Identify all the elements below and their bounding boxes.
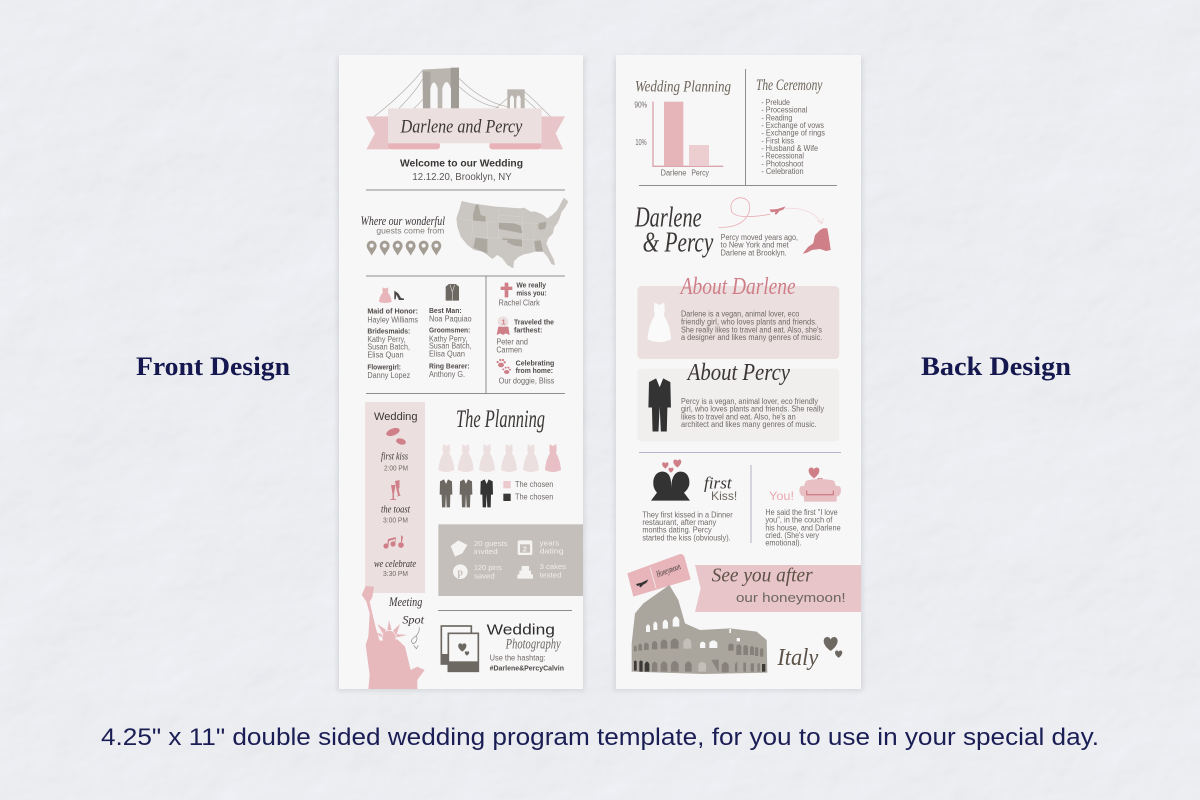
special mentions column: Our doggie, Bliss (499, 377, 554, 386)
bar chart: wedding planning: Percy (691, 168, 709, 177)
wedding party: middle column (429, 284, 472, 379)
panel: stats: saved (474, 571, 495, 580)
wedding party: left column: Susan Batch, (367, 343, 410, 352)
bar: Darlene (664, 102, 683, 166)
meeting spot note: Meeting (388, 595, 422, 609)
ribbon: see you after: our honeymoon! (736, 591, 846, 605)
first kiss story: months dating. Percy (642, 526, 712, 535)
we celebrate time (374, 559, 416, 578)
special mentions column: Carmen (496, 345, 522, 354)
panel: stats: 20 guests (474, 539, 508, 548)
wedding party: middle column: Susan Batch, (429, 342, 472, 351)
ribbon: see you after: See you after (712, 565, 813, 587)
ceremony list: - Reading (761, 113, 792, 122)
icon row: groomsmen suits (440, 479, 493, 507)
move story text: to New York and met (721, 241, 789, 250)
panel: About Darlene (637, 274, 839, 359)
label: Back Design: Back Design (921, 352, 1072, 381)
welcome heading: Welcome to our Wedding (400, 159, 523, 170)
special mentions column: miss you: (516, 288, 547, 297)
panel: About Percy: likes to travel and eat. Also, he's an (681, 412, 796, 421)
love story text: emotional). (765, 539, 802, 548)
panel: front design card (337, 55, 585, 691)
ceremony list: - Recessional (761, 152, 804, 161)
bar: Percy (689, 145, 709, 166)
icon: heel (394, 291, 404, 300)
ceremony list: - Exchange of vows (761, 121, 824, 130)
move story text (721, 233, 798, 257)
panel: About Percy (637, 360, 839, 441)
icon: kissing couple with hearts (651, 460, 690, 501)
legend (503, 480, 553, 502)
bar chart: wedding planning: 10% (635, 138, 647, 147)
panel: About Darlene: a designer and likes many genres of music. (681, 333, 822, 342)
panel: stats: 120 pins (474, 563, 502, 572)
first kiss story: restaurant, after many (642, 518, 716, 527)
icon row: location pins (367, 241, 441, 256)
move story text: Darlene at Brooklyn. (721, 248, 787, 257)
ceremony list: - Processional (761, 106, 808, 115)
schedule heading: Wedding (374, 411, 418, 423)
special mentions column: Peter and (496, 338, 528, 347)
icon: tuxedo (648, 378, 671, 432)
icon: champagne glasses (390, 480, 401, 500)
love story text: cried. (She's very (765, 531, 819, 540)
move story text: Percy moved years ago, (721, 233, 798, 242)
label: Front Design: Front Design (136, 352, 291, 381)
icon: bridesmaid dress (379, 287, 392, 303)
meeting spot note (388, 595, 425, 649)
welcome heading (400, 159, 523, 183)
panel: About Darlene: Darlene is a vegan, animal lover, eco (681, 310, 800, 319)
caption: 4.25" x 11" double sided wedding program template, for you to use in your special day. (101, 724, 1099, 751)
wedding party: left column: Bridesmaids: (367, 326, 410, 335)
love story text (765, 508, 841, 548)
legend: The chosen (515, 480, 553, 489)
illustration: Brooklyn bridge (374, 68, 551, 117)
icon: pinterest (453, 564, 468, 579)
we celebrate time: 3:30 PM (383, 571, 408, 578)
bar chart: wedding planning (634, 79, 731, 177)
wedding party: middle column: Groomsmen: (429, 326, 470, 335)
icon: medal: 1 (501, 317, 506, 326)
wedding party: left column: Maid of Honor: (367, 307, 418, 316)
welcome heading: 12.12.20, Brooklyn, NY (412, 172, 512, 183)
special mentions column: Celebrating (516, 358, 555, 367)
special mentions column: We really (516, 281, 547, 290)
wedding party: left column: Danny Lopez (367, 371, 410, 380)
icon: cake (517, 566, 533, 579)
you heading: You! (769, 489, 794, 503)
we celebrate time: we celebrate (374, 559, 416, 570)
special mentions column: from home: (516, 366, 553, 375)
special mentions column: Rachel Clark (499, 299, 540, 308)
icon: paw prints (496, 359, 511, 374)
panel: stats: invited (474, 547, 498, 556)
icon row: bridesmaid dresses (438, 444, 561, 472)
icon: calendar (518, 540, 532, 555)
wedding photography text (487, 622, 564, 672)
icon: envelope (451, 540, 467, 557)
guests origin heading: Where our wonderful (361, 214, 445, 228)
first kiss heading: first (704, 473, 733, 492)
illustration: Statue of Liberty (362, 586, 425, 689)
first kiss time: 2:00 PM (384, 466, 408, 472)
guests origin heading: guests come from (376, 226, 445, 235)
heading: The Planning: The Planning (456, 406, 545, 433)
illustration: Colosseum (632, 585, 767, 674)
heading: Wedding Planning (635, 79, 731, 96)
wedding party: left column (367, 287, 418, 380)
banner with names (366, 108, 565, 149)
the toast time (381, 504, 411, 524)
love story text: you", in the couch of (765, 516, 833, 525)
first kiss time (381, 450, 408, 472)
wedding photography text: Wedding (487, 622, 555, 638)
ceremony list: - Photoshoot (761, 159, 804, 168)
guests origin heading (361, 214, 445, 235)
panel: stats (438, 524, 583, 596)
panel: stats: dating (540, 546, 564, 555)
ceremony list: - Husband & Wife (761, 144, 818, 153)
special mentions column: Traveled the (514, 318, 554, 327)
ceremony list: - Exchange of rings (761, 129, 825, 138)
wedding photography text: #Darlene&PercyCalvin (490, 663, 564, 672)
icon: sofa with hearts (799, 468, 841, 502)
icon: wedding dress (647, 302, 671, 342)
wedding photography text: Photography (505, 636, 561, 652)
Italy label with hearts: Italy (776, 645, 819, 671)
Italy label with hearts (776, 637, 842, 671)
panel: stats: 3 cakes (540, 562, 566, 571)
the toast time: 3:00 PM (383, 518, 408, 524)
panel: stats: tested (540, 570, 562, 579)
first kiss story (642, 510, 733, 542)
panel: wedding schedule (365, 402, 425, 593)
icon: lips (385, 426, 407, 446)
wedding party: middle column: Anthony G. (429, 370, 465, 379)
panel: back design card (614, 55, 863, 691)
icon: honeymoon ticket (627, 554, 691, 597)
icon: plane (769, 206, 786, 214)
panel: About Percy: architect and likes many genres of music. (681, 420, 817, 429)
first kiss heading (704, 473, 737, 503)
icon: music notes (383, 535, 404, 549)
wedding party: left column: Hayley Williams (367, 315, 418, 324)
icon: New York state (803, 228, 831, 254)
first kiss story: They first kissed in a Dinner (642, 510, 733, 519)
panel: About Percy: girl, who loves plants and friends. She really (681, 405, 824, 414)
wedding party: left column: Kathy Perry, (367, 335, 406, 344)
bar chart: wedding planning: Darlene (661, 168, 687, 177)
flight path arrow (719, 198, 823, 227)
wedding photography text: Use the hashtag: (490, 654, 546, 663)
meeting spot note: Spot (402, 612, 425, 626)
icon: best man suit (446, 284, 459, 301)
panel: stats: years (540, 538, 559, 547)
wedding party: middle column: Ring Bearer: (429, 361, 470, 370)
icon: honeymoon ticket: Honeymoon (655, 562, 682, 580)
panel: About Percy: Percy is a vegan, animal lover, eco friendly (681, 397, 818, 406)
wedding party: middle column: Best Man: (429, 306, 462, 315)
special mentions column: farthest: (514, 325, 542, 334)
wedding party: middle column: Elisa Quan (429, 350, 465, 359)
wedding party: left column: Flowergirl: (367, 362, 401, 371)
first kiss time: first kiss (381, 450, 408, 462)
panel: About Darlene: She really likes to travel and eat. Also, she's (681, 325, 822, 334)
banner with names: Darlene and Percy (400, 116, 523, 137)
the toast time: the toast (381, 504, 411, 516)
ceremony list (756, 77, 825, 176)
legend: The chosen (515, 493, 553, 502)
couple script title: Darlene (634, 203, 702, 234)
first kiss story: started the kiss (obviously). (642, 533, 731, 542)
ceremony list: - First kiss (761, 136, 794, 145)
love story text: He said the first "I love (765, 508, 838, 517)
panel: About Percy: About Percy (686, 360, 790, 386)
wedding party: middle column: Kathy Perry, (429, 334, 467, 343)
couple script title: & Percy (643, 228, 714, 259)
ribbon: see you after (695, 565, 861, 612)
icon: polaroid photos (441, 626, 478, 671)
icon: pinterest: p (457, 567, 463, 578)
panel: About Darlene: friendly girl, who loves plants and friends. (681, 318, 817, 327)
first kiss heading: Kiss! (711, 490, 737, 503)
heading: The Ceremony (756, 77, 823, 94)
ceremony list: - Prelude (761, 98, 790, 107)
panel: About Darlene: About Darlene (679, 274, 796, 300)
icon: cross (501, 283, 512, 297)
love story text: his house, and Darlene (765, 523, 841, 532)
couple script title (634, 203, 714, 259)
bar chart: wedding planning: 90% (634, 100, 647, 109)
icon: calendar: 2 (523, 544, 527, 553)
map: United States (456, 198, 568, 268)
wedding party: middle column: Noa Paquiao (429, 315, 472, 324)
ceremony list: - Celebration (761, 167, 804, 176)
special mentions column (496, 281, 555, 386)
wedding party: left column: Elisa Quan (367, 350, 404, 359)
